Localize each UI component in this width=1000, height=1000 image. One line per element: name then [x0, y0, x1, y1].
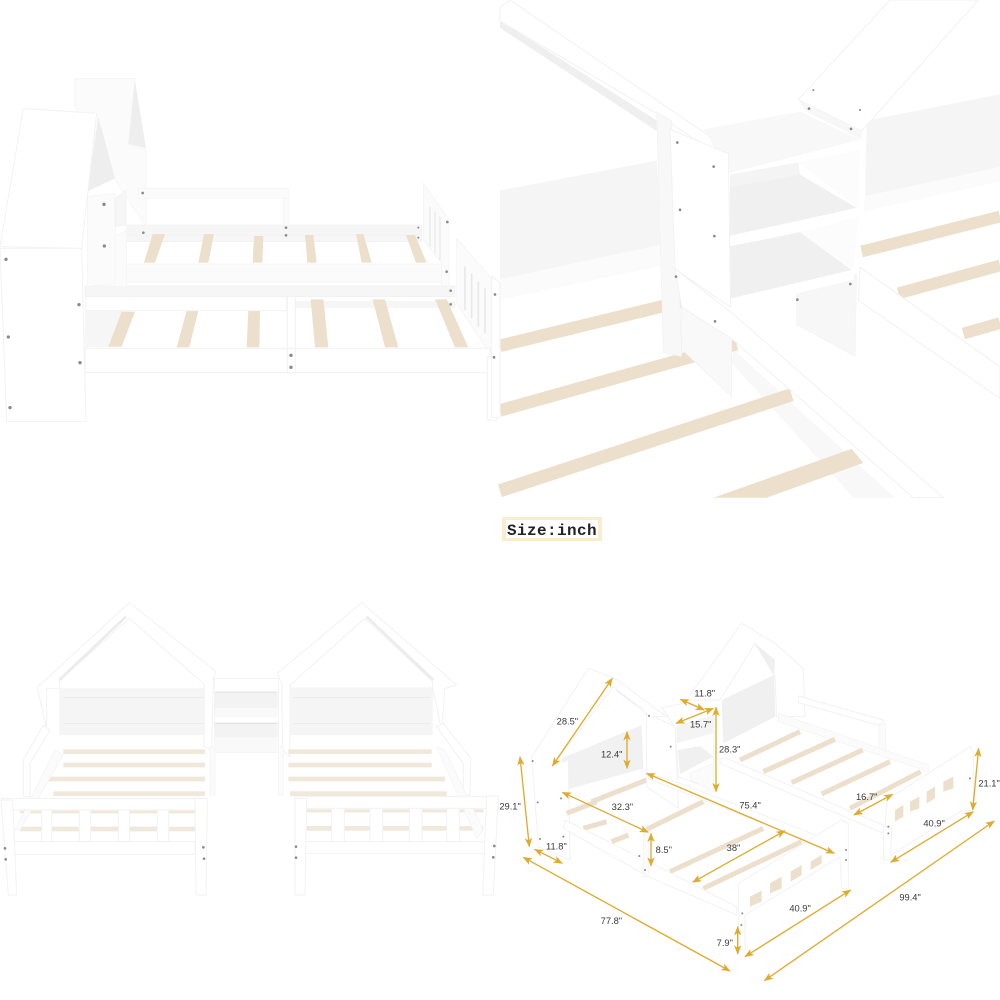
- rear bed: [75, 78, 449, 287]
- dimension labels: 29.1": [499, 801, 521, 811]
- posts and legs: [657, 112, 857, 396]
- dimension labels: 16.7": [856, 792, 877, 802]
- dimension labels: 75.4": [739, 800, 761, 810]
- front bed house: [532, 668, 667, 860]
- dimension labels: 28.3": [719, 744, 740, 754]
- front bed slats: [567, 780, 802, 898]
- screws: [4, 845, 496, 861]
- dimension labels: 40.9": [789, 904, 811, 914]
- dimension labels: 99.4": [899, 892, 921, 902]
- panel: side view of two beds: [0, 78, 497, 422]
- dimension labels: 28.5": [557, 716, 578, 726]
- left footboard: [1, 798, 207, 895]
- panel: close-up of centre shelf: [492, 0, 1000, 498]
- screws: [4, 192, 496, 409]
- side rails: [15, 723, 483, 838]
- panel: front view of two house beds: [1, 603, 498, 895]
- dimension labels: 8.5": [656, 845, 672, 855]
- bed side lip: [732, 349, 895, 498]
- dimension labels: 21.1": [978, 779, 1000, 789]
- dimension labels: 7.9": [717, 938, 733, 948]
- dimension labels: 11.8": [694, 689, 715, 699]
- dimension labels: 11.8": [546, 841, 567, 851]
- shelf unit: [647, 703, 713, 808]
- shelf unit: [670, 112, 860, 309]
- right footboard: [295, 796, 498, 895]
- house end panels and shelf: [0, 108, 127, 422]
- centre shelf: [214, 678, 278, 752]
- dimension arrows: [520, 678, 994, 981]
- slats: [500, 217, 1000, 498]
- screws: [493, 89, 861, 359]
- screws: [532, 715, 971, 926]
- front bed rails and footboards: [563, 773, 848, 950]
- right bed house frame: [277, 603, 457, 757]
- headboards: [500, 94, 1000, 300]
- rear bed: [687, 623, 973, 860]
- panel: dimension diagram: [499, 623, 1000, 981]
- dimension labels: 32.3": [612, 802, 633, 812]
- label: size in inches: Size:inch: [507, 522, 597, 540]
- dimension labels: [499, 689, 1000, 948]
- dimension labels: 12.4": [601, 749, 622, 759]
- front bed: [85, 238, 497, 420]
- slats: [20, 749, 483, 831]
- dimension labels: 40.9": [923, 819, 945, 829]
- dimension labels: 15.7": [690, 720, 711, 730]
- roof beams: [500, 0, 978, 157]
- left bed house frame: [37, 603, 216, 750]
- label: size in inches: [502, 517, 602, 541]
- dimension labels: 77.8": [601, 916, 622, 926]
- dimension labels: 38": [727, 843, 740, 853]
- side rails: [492, 267, 1000, 498]
